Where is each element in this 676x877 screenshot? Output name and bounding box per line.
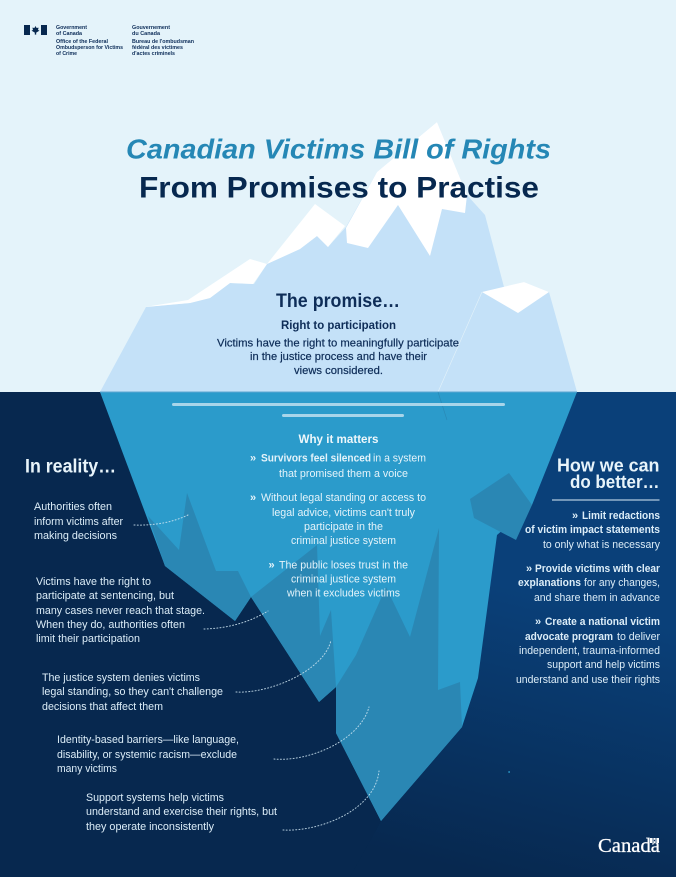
point: public loses trust (268, 560, 408, 600)
point: survivors feel silenced: Survivors feel silenced (261, 452, 371, 464)
reality: authorities inform: inform victims after (34, 516, 123, 528)
reality: legal standing: The justice system denies victims (42, 672, 200, 684)
french signature text: fédéral des victimes (132, 45, 183, 51)
reality: support systems (86, 792, 277, 833)
point: legal standing: participate in the (304, 521, 383, 533)
recommendation: national victim advocate program: understand and use their rights (516, 674, 660, 686)
recommendation: clear explanations: explanations (518, 577, 581, 589)
dotted leader lines (134, 515, 379, 830)
reality: support systems: they operate inconsistently (86, 821, 214, 833)
english signature text: of Crime (56, 51, 77, 57)
recommendation: national victim advocate program: independent, trauma-informed (519, 645, 660, 657)
english signature text: Government (56, 25, 87, 31)
recommendation: national victim advocate program: Create a national victim (545, 616, 660, 628)
water line bars (172, 403, 505, 417)
point: legal standing: Without legal standing or access to (261, 492, 426, 504)
recommendation: limit redactions (525, 510, 660, 551)
heading: why it matters: Why it matters (298, 434, 378, 446)
point: public loses trust: when it excludes victims (286, 588, 400, 600)
recommendation: national victim advocate program: to deliver (617, 631, 660, 643)
recommendation: clear explanations: and share them in advance (534, 592, 660, 604)
reality: authorities inform: Authorities often (34, 501, 112, 513)
point: public loses trust: criminal justice system (291, 574, 396, 586)
point: survivors feel silenced: » (250, 452, 256, 464)
recommendation: limit redactions: Limit redactions (582, 510, 660, 522)
panel: how we can do better (516, 454, 661, 686)
recommendation: national victim advocate program (516, 616, 660, 686)
reality: sentencing: limit their participation (36, 633, 140, 645)
reality: identity-based barriers (57, 734, 239, 775)
reality: support systems: Support systems help victims (86, 792, 224, 804)
promise text: Victims have the right to meaningfully participate (217, 338, 459, 350)
reality: legal standing: legal standing, so they can't challenge (42, 686, 223, 698)
promise text: views considered. (294, 365, 383, 377)
title: From Promises to Practise (139, 172, 539, 204)
reality: sentencing: many cases never reach that stage. (36, 605, 205, 617)
iceberg above water (100, 122, 577, 392)
heading: how we can do better: do better… (570, 471, 660, 492)
reality: sentencing: When they do, authorities often (36, 619, 185, 631)
panel: the promise (217, 291, 459, 377)
french signature text: du Canada (132, 31, 160, 37)
french signature text: Gouvernement (132, 25, 170, 31)
icon: wordmark flag (650, 838, 659, 843)
english signature text: Office of the Federal (56, 39, 109, 45)
title (126, 134, 551, 204)
english signature text: Ombudsperson for Victims (56, 45, 123, 51)
canada wordmark: Canada (598, 835, 660, 857)
heading: how we can do better (557, 454, 660, 492)
reality: support systems: understand and exercise their rights, but (86, 806, 277, 818)
english signature text (56, 25, 123, 57)
point: survivors feel silenced (250, 452, 426, 480)
recommendation: national victim advocate program: » (535, 616, 541, 628)
subheading: right to participation: Right to participation (281, 320, 396, 332)
french signature text: d'actes criminels (132, 51, 175, 57)
heading: the promise: The promise… (276, 291, 400, 312)
icon: Canadian flag (24, 25, 47, 35)
reality: identity-based barriers: many victims (57, 763, 117, 775)
panel: why it matters (250, 434, 426, 600)
recommendation: limit redactions: to only what is necessary (543, 539, 660, 551)
reality: authorities inform (34, 501, 123, 542)
point: legal standing: » (250, 492, 256, 504)
reality: identity-based barriers: disability, or systemic racism—exclude (57, 749, 237, 761)
recommendation: national victim advocate program: advocate program (525, 631, 613, 643)
heading: how we can do better: How we can (557, 454, 660, 476)
reality: sentencing: participate at sentencing, but (36, 590, 174, 602)
title: Canadian Victims Bill of Rights (126, 134, 551, 164)
point: legal standing (250, 492, 426, 547)
recommendation: clear explanations (518, 563, 661, 604)
heading: in reality: In reality… (25, 456, 116, 478)
english signature text: of Canada (56, 31, 82, 37)
recommendation: limit redactions: of victim impact statements (525, 524, 660, 536)
point: legal standing: criminal justice system (291, 535, 396, 547)
reality: identity-based barriers: Identity-based barriers—like language, (57, 734, 239, 746)
promise text (217, 338, 459, 377)
government of Canada signature (24, 25, 194, 57)
panel: in reality (25, 456, 277, 833)
promise text: in the justice process and have their (250, 351, 427, 363)
recommendation: limit redactions: » (572, 510, 578, 522)
point: survivors feel silenced: in a system (373, 452, 426, 464)
reality: authorities inform: making decisions (34, 530, 117, 542)
reality: legal standing: decisions that affect them (42, 701, 163, 713)
point: survivors feel silenced: that promised them a voice (279, 468, 408, 480)
point: legal standing: legal advice, victims can't truly (272, 507, 415, 519)
point: public loses trust: The public loses trust in the (279, 560, 408, 572)
reality: sentencing: Victims have the right to (36, 576, 151, 588)
french signature text (132, 25, 194, 57)
recommendation: clear explanations: for any changes, (584, 577, 660, 589)
reality: sentencing (36, 576, 205, 645)
recommendation: clear explanations: » (526, 563, 532, 575)
iceberg below water (100, 392, 577, 821)
recommendation: clear explanations: Provide victims with clear (535, 563, 661, 575)
recommendation: national victim advocate program: support and help victims (547, 659, 660, 671)
french signature text: Bureau de l'ombudsman (132, 39, 194, 45)
point: public loses trust: » (268, 560, 275, 572)
reality: legal standing (42, 672, 223, 713)
